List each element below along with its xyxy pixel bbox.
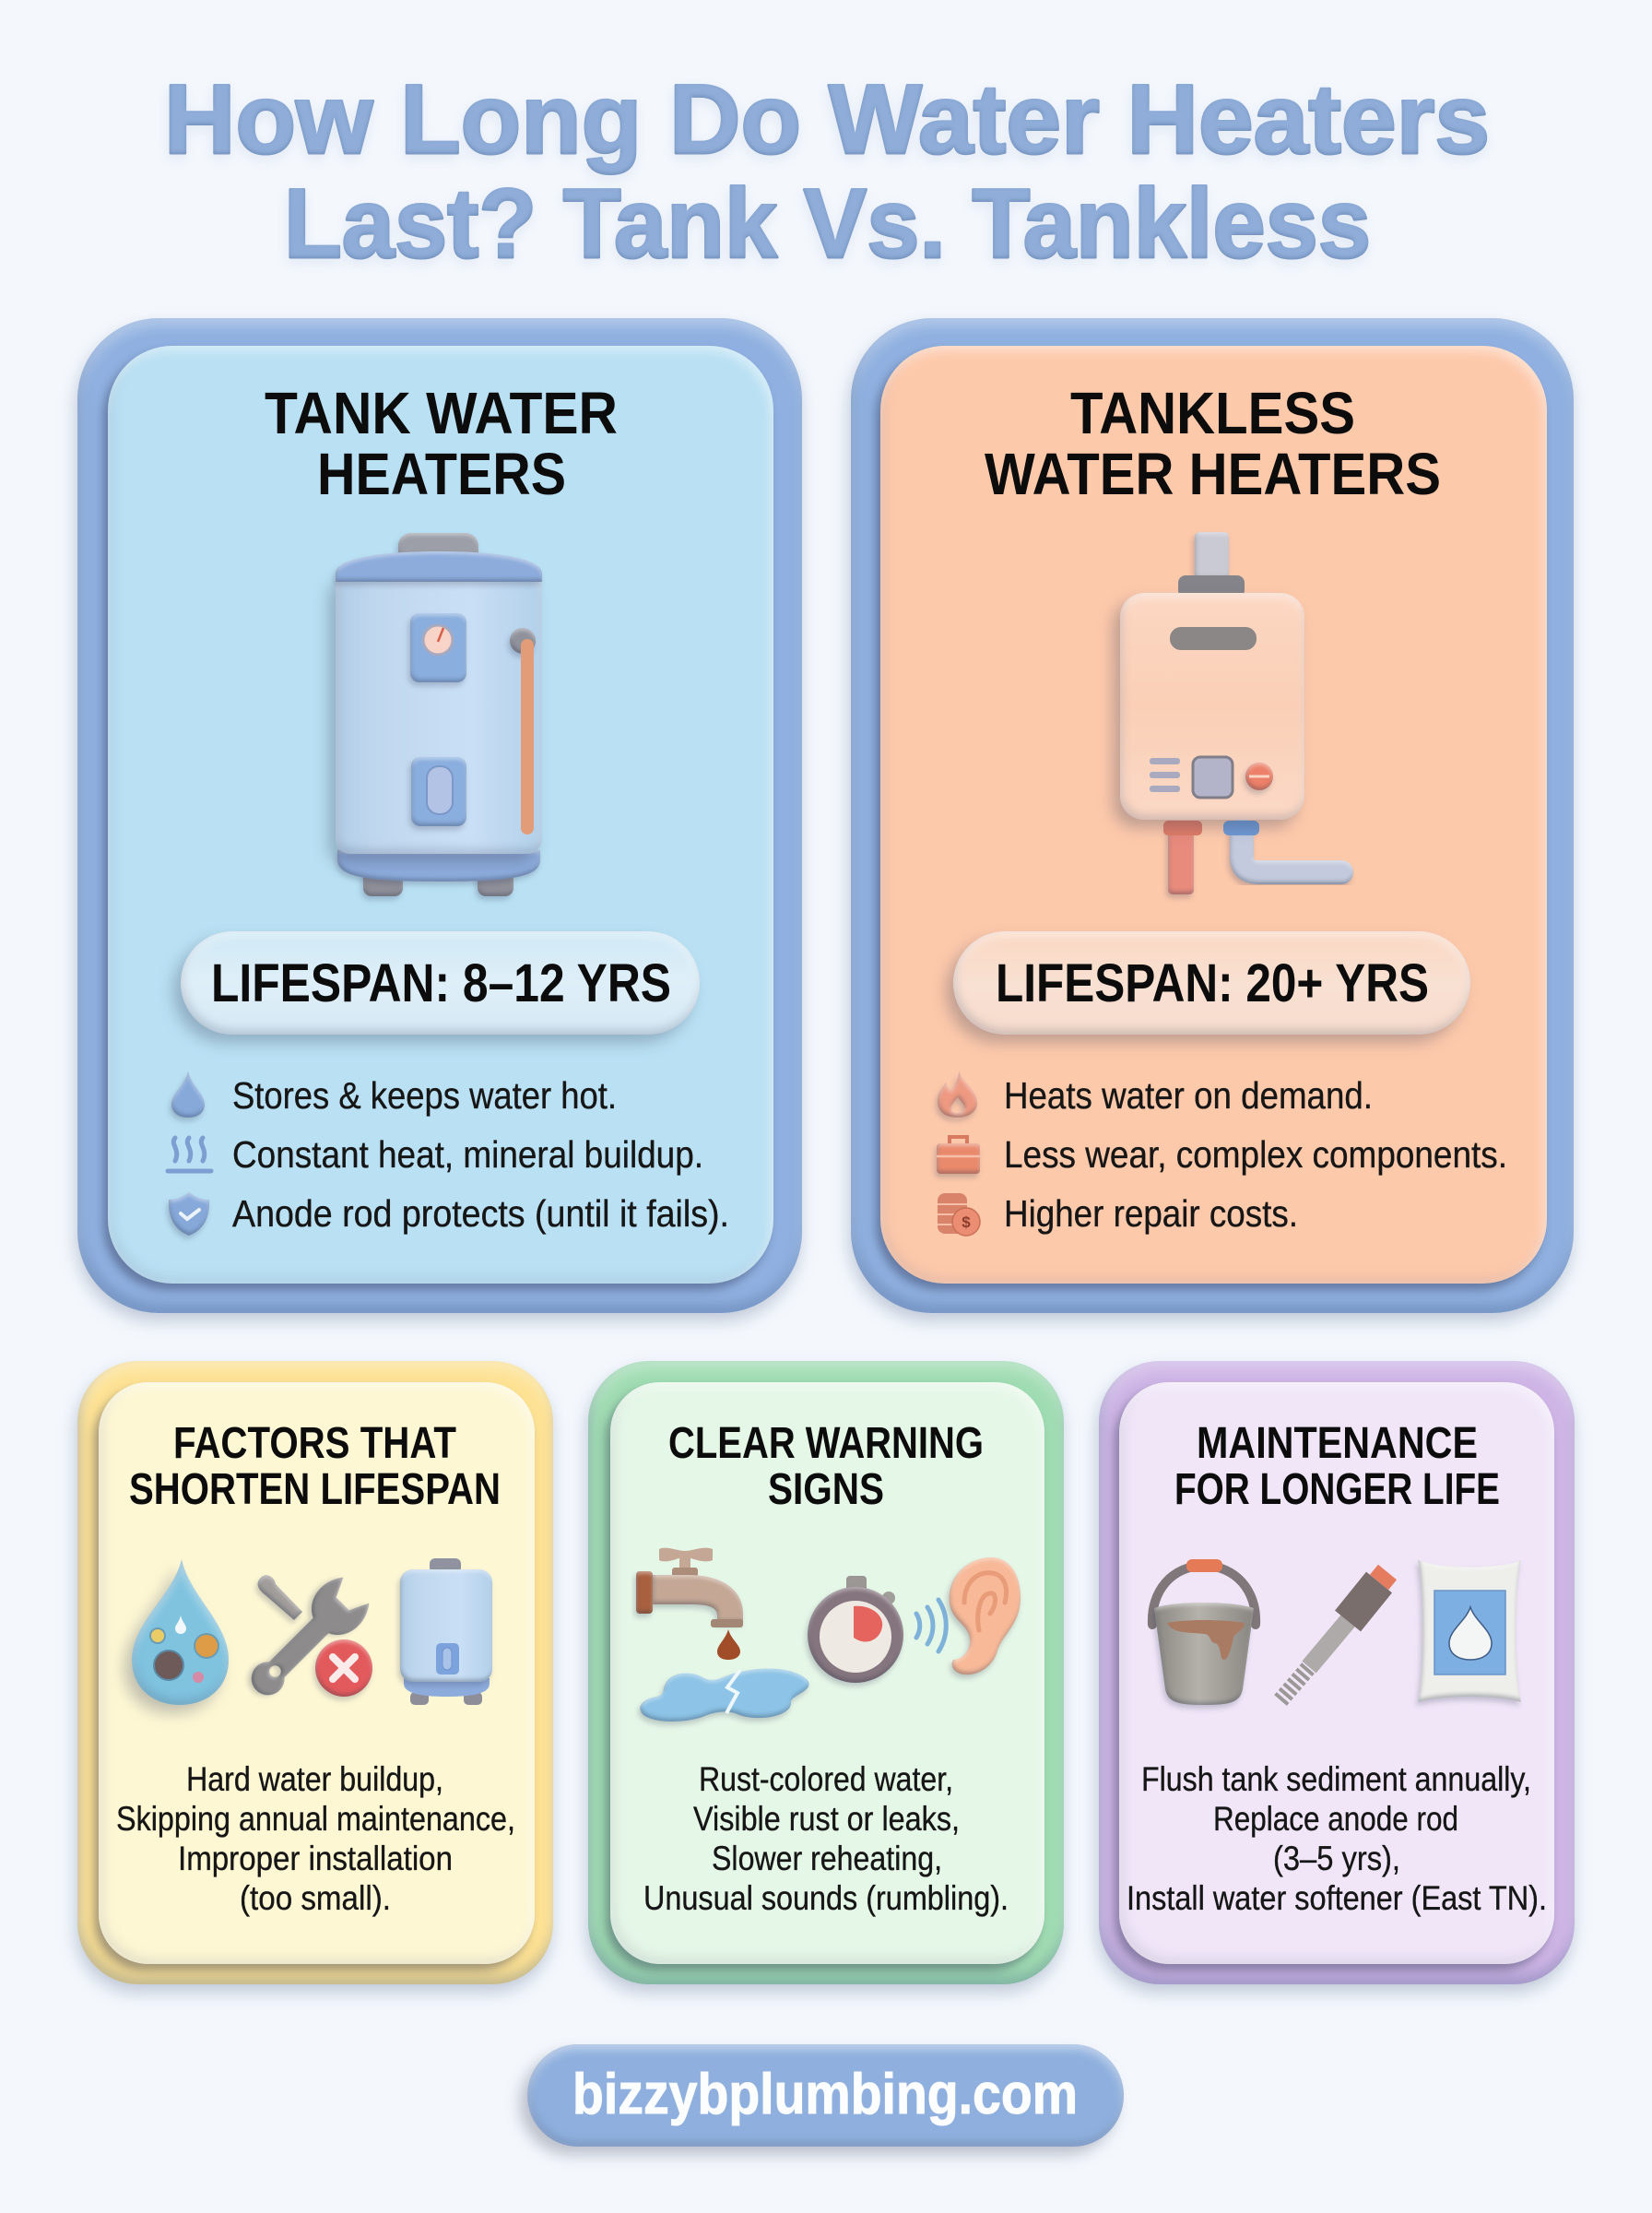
text: maintenance: Install water softener (East TN).	[1127, 1879, 1547, 1917]
footer pill: website: bizzybplumbing.com	[572, 2063, 1078, 2126]
icon: hard water drop	[132, 1559, 229, 1705]
text: tank bullets: Anode rod protects (until it fails).	[232, 1192, 729, 1235]
footer pill: website	[527, 2044, 1124, 2147]
bullets: tankless	[937, 1071, 1507, 1236]
heading: warning signs: SIGNS	[768, 1465, 884, 1514]
heading: maintenance: MAINTENANCE	[1197, 1419, 1478, 1468]
icon: tankless water heater	[1120, 532, 1341, 894]
icon: briefcase	[937, 1137, 980, 1174]
title: How Long Do Water Heaters	[164, 64, 1490, 174]
text: factors: Improper installation	[178, 1840, 453, 1877]
heading: tankless water heaters: WATER HEATERS	[985, 441, 1441, 507]
pipe	[510, 628, 536, 828]
text: tank bullets: Stores & keeps water hot.	[232, 1074, 617, 1117]
heading: factors: FACTORS THAT	[173, 1419, 456, 1468]
icon: flame	[938, 1071, 977, 1118]
icon: anode rod	[1280, 1572, 1387, 1700]
text: factors	[116, 1760, 515, 1917]
heading: tank water heaters: HEATERS	[317, 441, 566, 507]
lifespan pill: tank	[181, 931, 700, 1035]
heading: tank water heaters: TANK WATER	[265, 380, 618, 446]
lifespan pill: tankless: LIFESPAN: 20+ YRS	[996, 953, 1429, 1013]
panel: tank water heaters	[77, 318, 802, 1313]
text: warning signs	[643, 1760, 1009, 1917]
text: maintenance: Replace anode rod	[1213, 1800, 1458, 1838]
lifespan pill: tank: LIFESPAN: 8–12 YRS	[211, 953, 671, 1013]
text: tank bullets: Constant heat, mineral buildup.	[232, 1133, 703, 1176]
text: warning signs: Visible rust or leaks,	[693, 1800, 960, 1838]
icon: sound waves	[916, 1600, 946, 1651]
bullets: tank	[168, 1071, 729, 1236]
text: tankless bullets	[1004, 1074, 1507, 1235]
heading: tankless water heaters	[985, 380, 1441, 507]
heading: factors	[129, 1419, 501, 1514]
text: factors: (too small).	[240, 1879, 391, 1917]
vent lines	[1150, 758, 1180, 792]
text: factors: Skipping annual maintenance,	[116, 1800, 515, 1838]
text: tankless bullets: Less wear, complex components.	[1004, 1133, 1507, 1176]
text: warning signs: Rust-colored water,	[699, 1760, 953, 1798]
icon: ear	[950, 1557, 1021, 1675]
icon: stopwatch	[808, 1576, 903, 1683]
icon: wrench with x	[238, 1571, 375, 1709]
icon: shield	[169, 1192, 209, 1236]
panel: maintenance for longer life	[1099, 1361, 1575, 1984]
title	[164, 64, 1490, 278]
display slot	[1170, 627, 1257, 650]
text: tankless bullets: Higher repair costs.	[1004, 1192, 1298, 1235]
title: Last? Tank Vs. Tankless	[284, 168, 1371, 278]
text: warning signs: Slower reheating,	[712, 1840, 942, 1877]
panel: tankless water heaters	[851, 318, 1574, 1313]
icon: dripping faucet	[636, 1548, 743, 1660]
icon: coins	[938, 1193, 980, 1236]
heading: warning signs: CLEAR WARNING	[668, 1419, 984, 1468]
control square	[1193, 757, 1233, 798]
text: maintenance: Flush tank sediment annually,	[1141, 1760, 1531, 1798]
icon: softener salt bag	[1418, 1560, 1521, 1702]
access box	[411, 757, 466, 826]
rust drip	[717, 1629, 740, 1660]
heading: maintenance	[1174, 1419, 1500, 1514]
text: tank bullets	[232, 1074, 729, 1235]
icon: small water heater	[400, 1558, 492, 1705]
lifespan pill: tankless	[953, 931, 1470, 1035]
heading: tank water heaters	[265, 380, 618, 507]
heading: factors: SHORTEN LIFESPAN	[129, 1465, 501, 1514]
icon: puddle	[640, 1669, 809, 1722]
icon: sediment bucket	[1152, 1559, 1256, 1705]
red knob	[1245, 763, 1273, 790]
text: maintenance	[1127, 1760, 1547, 1917]
icon: coins: $	[962, 1213, 971, 1231]
panel: clear warning signs	[588, 1361, 1064, 1984]
heading: warning signs	[668, 1419, 984, 1514]
heading: maintenance: FOR LONGER LIFE	[1174, 1465, 1500, 1514]
text: factors: Hard water buildup,	[186, 1760, 443, 1798]
heading: tankless water heaters: TANKLESS	[1070, 380, 1355, 446]
text: tankless bullets: Heats water on demand.	[1004, 1074, 1373, 1117]
icon: steam	[168, 1138, 211, 1171]
text: maintenance: (3–5 yrs),	[1273, 1840, 1400, 1877]
text: warning signs: Unusual sounds (rumbling).	[643, 1879, 1009, 1917]
panel: factors that shorten lifespan	[77, 1361, 553, 1984]
icon: drop	[171, 1071, 205, 1118]
icon: tank water heater	[336, 533, 542, 896]
gauge box	[410, 613, 466, 682]
